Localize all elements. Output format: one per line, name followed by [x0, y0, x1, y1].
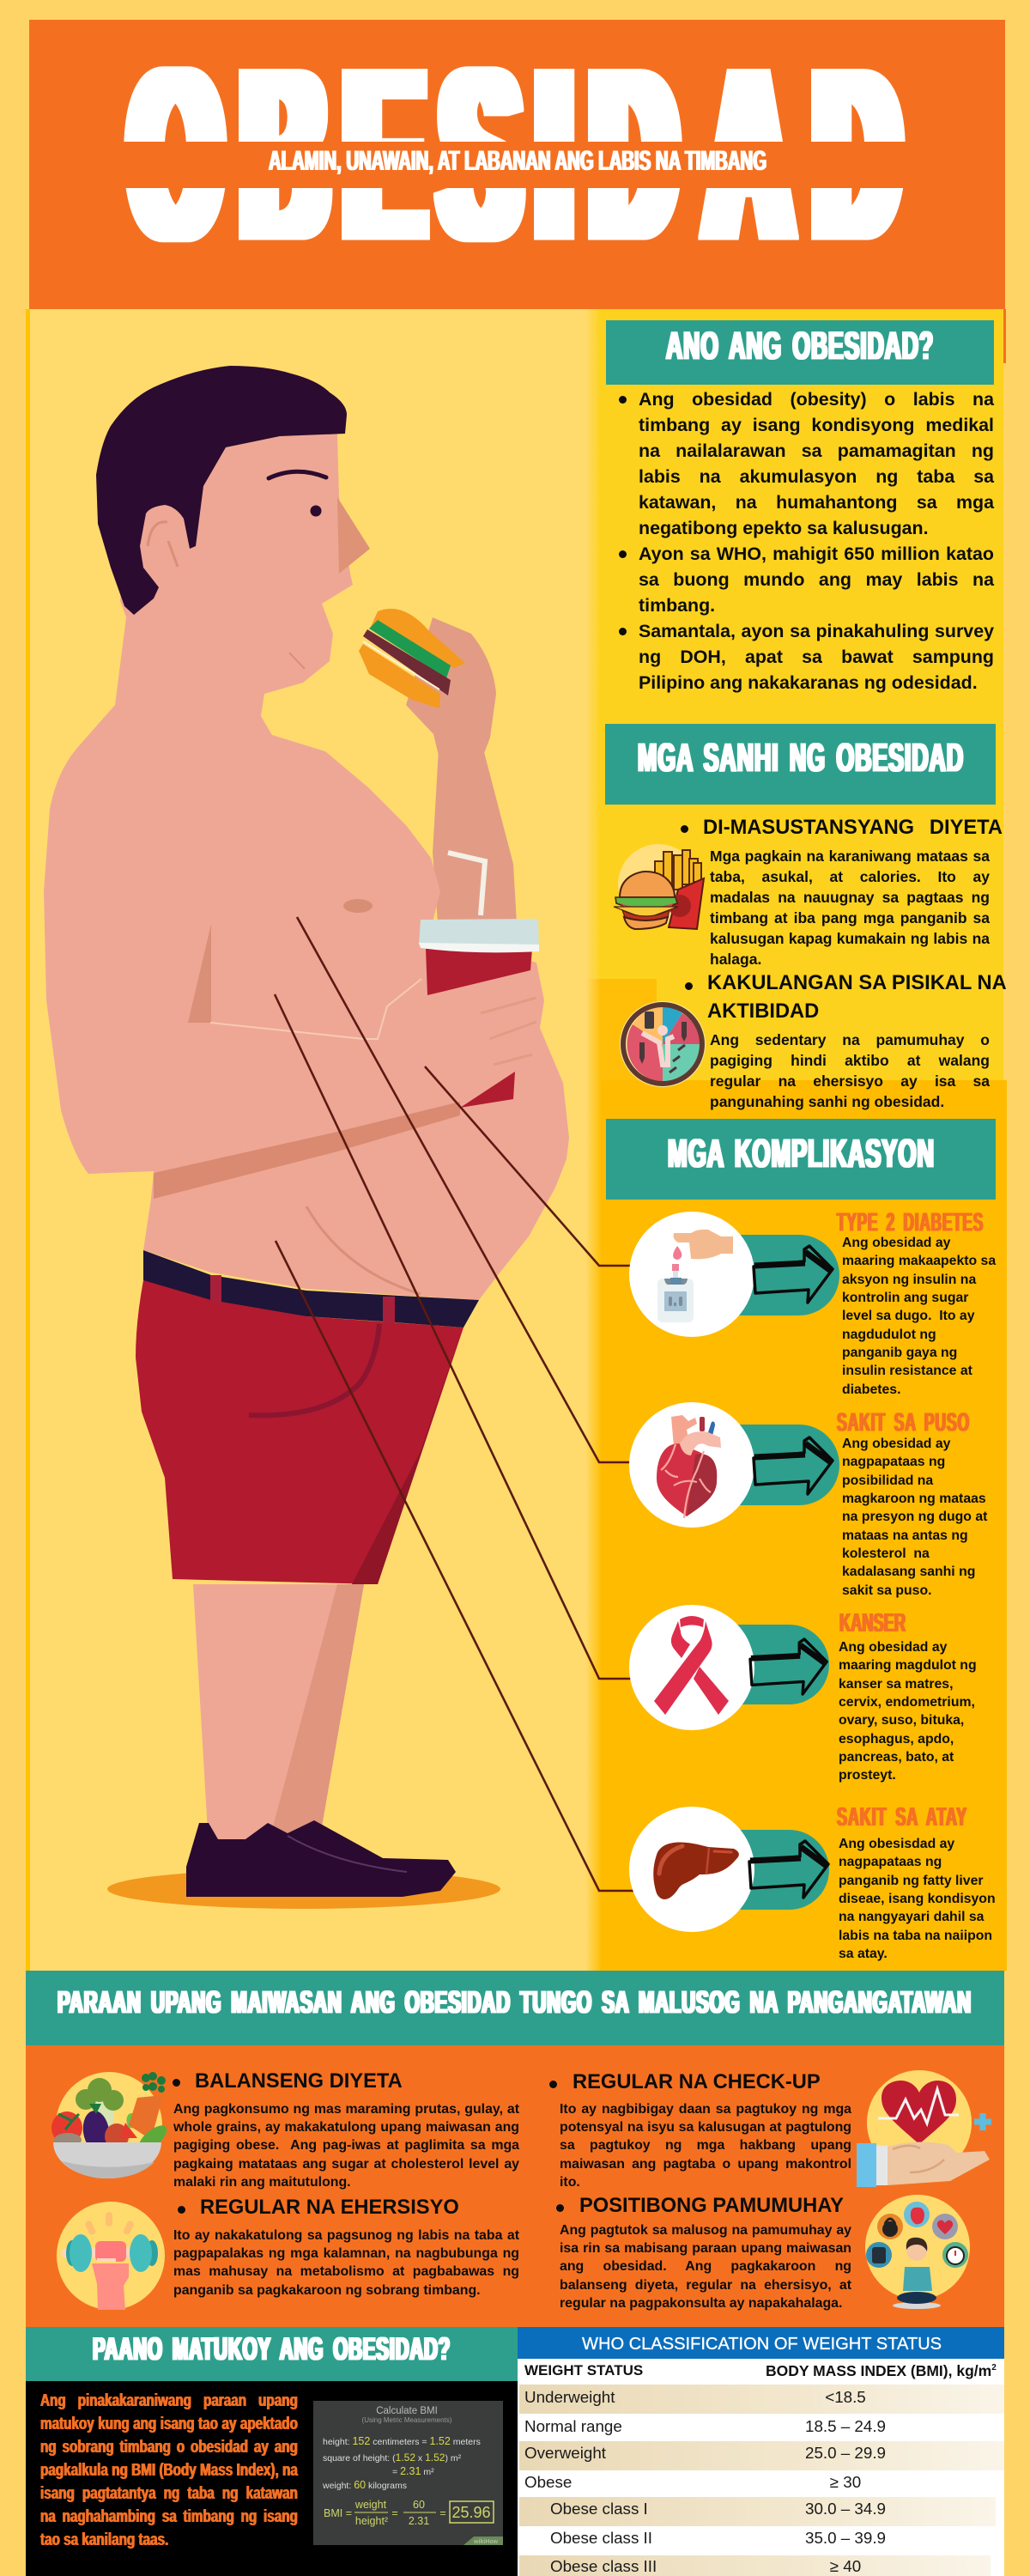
panel: header banner	[29, 20, 1005, 309]
body text: maiwasan ang pagtaba o upang makontrol	[560, 2157, 851, 2172]
body text: labis na akumulasyon ng taba sa	[639, 466, 994, 487]
text: panganib ng fatty liver	[839, 1874, 984, 1888]
text	[842, 1437, 987, 1598]
chalkboard BMI calculation: wikiHow	[473, 2539, 499, 2545]
panel: amber step	[601, 979, 657, 1080]
text: level sa dugo. Ito ay	[842, 1309, 975, 1323]
red shirt piece	[460, 1072, 515, 1108]
chalkboard BMI calculation: 60	[413, 2499, 425, 2511]
title: KANSER	[839, 1607, 906, 1637]
text	[839, 1640, 977, 1783]
pointer line: diabetes	[425, 1066, 631, 1266]
hand holding burger	[406, 617, 496, 756]
chalkboard BMI calculation: height: 152 centimeters = 1.52 meters	[323, 2435, 481, 2447]
arm shadow	[154, 1102, 460, 1199]
body text: malaki rin ang maitutulong.	[173, 2175, 351, 2190]
subheading: inactivity: KAKULANGAN SA PISIKAL NA	[707, 972, 1007, 994]
row: obese: ≥ 30	[830, 2473, 861, 2491]
arrow	[748, 1839, 830, 1899]
text: maaring makaapekto sa	[842, 1254, 996, 1268]
body text: pagkaing matataas ang sugar at cholesterol level ay	[173, 2157, 519, 2172]
body text: timbang ay isang kondisyong medikal	[639, 415, 994, 435]
chalkboard BMI calculation: weight: 60 kilograms	[322, 2479, 407, 2491]
text: nagpapataas ng	[839, 1855, 942, 1869]
shoe highlight	[288, 1836, 407, 1872]
row: normal	[524, 2418, 1005, 2435]
icon: dumbbell fist	[57, 2202, 165, 2310]
body text: Ito ay nakakatulong sa pagsunog ng labis na taba at	[173, 2228, 519, 2243]
body text: inactivity: pagiging hindi aktibo at walang	[710, 1052, 990, 1069]
text: posibilidad na	[842, 1473, 933, 1488]
body text: isa rin sa mabisang paraan upang maiwasan	[560, 2241, 851, 2256]
text: kanser sa matres,	[839, 1677, 953, 1692]
row: overweight: 25.0 – 29.9	[805, 2444, 886, 2462]
shorts shadow	[352, 1335, 460, 1584]
heading bar	[605, 724, 996, 805]
panel: mga sanhi ng obesidad	[605, 724, 1007, 1110]
straw	[448, 853, 485, 915]
panel: paano matukoy body	[26, 2381, 518, 2576]
text: nagdudulot ng	[842, 1327, 936, 1342]
body text: ng DOH, apat sa bawat sampung	[639, 647, 994, 667]
icon: liver in white circle	[629, 1807, 754, 1932]
text: Ang obesidad ay	[842, 1437, 950, 1451]
icon: burger and fries	[613, 844, 706, 930]
row: underweight: <18.5	[825, 2388, 866, 2406]
subheading: REGULAR NA EHERSISYO	[200, 2196, 459, 2219]
text: ovary, suso, bituka,	[839, 1713, 964, 1728]
chalkboard BMI calculation: square of height: (1.52 x 1.52) m²	[323, 2451, 462, 2464]
body text: diet	[710, 848, 991, 968]
text: insulin resistance at	[842, 1364, 972, 1378]
body text	[173, 2228, 519, 2298]
text: maaring magdulot ng	[839, 1658, 977, 1673]
text: sa atay.	[839, 1947, 888, 1961]
body text: diet: madalas na nauugnay sa pagtaas ng	[710, 889, 990, 906]
body text: balanseng diyeta, regular na ehersisyo, at	[560, 2278, 851, 2293]
heading bar	[606, 320, 994, 385]
text: mataas na antas ng	[842, 1528, 968, 1543]
panel: WHO classification table	[518, 2327, 1004, 2576]
icon: ribbon in white circle	[629, 1605, 754, 1730]
text	[842, 1236, 996, 1397]
title: OBESIDAD	[131, 19, 898, 291]
orange description text	[40, 2390, 298, 2552]
panel: paano matukoy heading	[26, 2327, 518, 2381]
column header: BMI: BODY MASS INDEX (BMI), kg/m2	[766, 2362, 997, 2379]
pointer line: cancer	[275, 994, 631, 1679]
chalkboard BMI calculation: =	[439, 2507, 446, 2519]
row: obese class II: 35.0 – 39.9	[805, 2529, 886, 2547]
orange description text: Ang pinakakaraniwang paraan upang	[40, 2391, 298, 2410]
row: obese class I	[550, 2500, 997, 2518]
forearm	[433, 749, 517, 923]
text: diabetes.	[842, 1382, 900, 1397]
nipple	[343, 899, 373, 913]
panel: fade strip upper	[585, 309, 601, 979]
body text: mas mahusay na metabolismo at pagbabawas ng	[173, 2264, 519, 2279]
row: obese class III	[550, 2558, 997, 2575]
body text: whole grains, ay makakatulong upang maiwasan ang	[173, 2120, 519, 2135]
body text: diet: taba, asukal, at calories. Ito ay	[710, 868, 990, 885]
body text: panganib sa pagkakaroon ng sobrang timbang.	[173, 2283, 481, 2298]
orange description text: matukoy kung ang isang tao ay apektado	[40, 2415, 298, 2433]
table title: WHO CLASSIFICATION OF WEIGHT STATUS	[582, 2334, 942, 2354]
bullet	[556, 2203, 563, 2212]
icon: daily activity clock	[620, 1001, 706, 1087]
text: Ang obesisdad ay	[839, 1837, 954, 1851]
text: pancreas, bato, at	[839, 1750, 954, 1765]
row bands	[519, 2385, 1004, 2414]
text: kontrolin ang sugar	[842, 1291, 968, 1305]
chalkboard BMI calculation: weight	[354, 2499, 387, 2511]
hair	[96, 366, 347, 615]
body text: diet: timbang at iba pang mga panganib sa	[710, 909, 990, 927]
icon: heart on hand	[854, 2069, 1000, 2190]
text: panganib gaya ng	[842, 1346, 957, 1360]
body text: Ang pagkonsumo ng mas maraming prutas, gulay, at	[173, 2102, 519, 2117]
shoes	[186, 1820, 456, 1897]
subheading: BALANSENG DIYETA	[195, 2070, 403, 2093]
body text: ang obesidad. Ang pagkakaroon ng	[560, 2259, 851, 2274]
bullet	[177, 2205, 185, 2214]
text: Ang obesidad ay	[839, 1640, 947, 1655]
row: obese class II: Obese class II	[550, 2529, 652, 2547]
text: na presyon ng dugo at	[842, 1510, 987, 1524]
text: Ang obesidad ay	[842, 1236, 950, 1250]
chin line	[289, 653, 305, 669]
eyebrow	[269, 471, 326, 478]
icon: vegetable bowl	[52, 2072, 167, 2178]
row: obese: Obese	[524, 2473, 572, 2491]
title cut band	[29, 141, 1005, 188]
subheading: REGULAR NA CHECK-UP	[573, 2071, 821, 2093]
body text: sa buong mundo ang may labis na	[639, 569, 994, 590]
subheading: inactivity: AKTIBIDAD	[707, 1000, 819, 1023]
body text	[639, 389, 994, 693]
body text: inactivity: Ang sedentary na pamumuhay o	[710, 1031, 990, 1048]
column header: weight status: WEIGHT STATUS	[524, 2362, 643, 2379]
arrow	[748, 1637, 828, 1696]
ear detail	[148, 522, 178, 567]
panel: ano ang obesidad	[606, 320, 994, 693]
row: obese class I: Obese class I	[550, 2500, 648, 2518]
text: kadalasang sanhi ng	[842, 1564, 975, 1579]
panel: fade strip lower	[585, 979, 601, 1971]
torso and head	[44, 434, 569, 1300]
text: esophagus, apdo,	[839, 1732, 954, 1747]
text: kolesterol na	[842, 1546, 930, 1561]
text	[839, 1837, 996, 1961]
complication: kanser	[629, 1605, 977, 1783]
body text: Pilipino ang nakakaranas ng odesidad.	[639, 672, 978, 693]
belly crease	[306, 1206, 421, 1294]
row: underweight: Underweight	[524, 2388, 615, 2406]
body text: inactivity	[710, 1031, 991, 1110]
body text: Samantala, ayon sa pinakahuling survey	[639, 621, 994, 641]
body text: pagpapalakas ng mga kalamnan, na nagbubunga ng	[173, 2246, 519, 2261]
eye	[311, 505, 321, 517]
fingers	[481, 998, 536, 1065]
teal pill	[678, 1235, 839, 1315]
bullets	[619, 396, 627, 635]
chalkboard BMI calculation: =	[391, 2507, 398, 2519]
teal pill	[678, 1625, 829, 1704]
body text: negatibong epekto sa kalusugan.	[639, 518, 929, 538]
chalkboard BMI calculation: 2.31	[409, 2515, 429, 2527]
body text: timbang.	[639, 595, 715, 616]
arm outline	[210, 979, 421, 1039]
body text	[560, 2221, 851, 2312]
icon: healthy lifestyle	[863, 2190, 974, 2310]
complication: sakit sa puso	[629, 1402, 987, 1598]
row: obese	[524, 2474, 1005, 2491]
nose	[337, 497, 370, 574]
text: diseae, isang kondisyon	[839, 1892, 996, 1906]
shorts	[136, 1280, 464, 1584]
row band	[519, 2441, 1004, 2470]
row band	[519, 2497, 996, 2526]
row: obese class III: ≥ 40	[830, 2557, 861, 2575]
orange description text: isang pagtatantya ng taba ng katawan	[40, 2484, 298, 2503]
body text: diet: halaga.	[710, 951, 761, 968]
body text: diet: Mga pagkain na karaniwang mataas sa	[710, 848, 990, 865]
arrow	[752, 1244, 834, 1304]
orange description text: tao sa kanilang taas.	[40, 2530, 168, 2549]
belt	[143, 1250, 479, 1327]
body text: regular na pagpakonsulta ay napakahalaga.	[560, 2296, 842, 2311]
text: na nangyayari dahil sa	[839, 1910, 984, 1924]
panel: illustration background	[26, 309, 601, 1971]
heading bar	[26, 1971, 1004, 2045]
body text: katawan, na humahantong sa mga	[639, 492, 994, 513]
row: normal: 18.5 – 24.9	[805, 2417, 886, 2435]
subheading: inactivity	[707, 972, 1007, 1023]
text: sakit sa puso.	[842, 1583, 931, 1598]
panel: orange edge	[1003, 309, 1006, 363]
row: underweight	[524, 2389, 1005, 2406]
body text	[560, 2100, 851, 2191]
body text: inactivity: regular na ehersisyo ay isa sa	[710, 1072, 990, 1090]
bullet	[685, 982, 692, 989]
body text: inactivity: pangunahing sanhi ng obesidad.	[710, 1093, 944, 1110]
legs	[193, 1584, 364, 1846]
panel: mga komplikasyon heading	[606, 1119, 996, 1200]
chalkboard BMI calculation: Calculate BMI	[376, 2406, 438, 2416]
pointer line: heart	[297, 917, 631, 1462]
row: normal: Normal range	[524, 2417, 622, 2435]
icon: heart in white circle	[629, 1402, 754, 1528]
teal pill	[678, 1830, 829, 1910]
bullet	[680, 824, 688, 833]
body text: diet: kalusugan kapag kumakain ng labis na	[710, 930, 990, 947]
body text: Ang pagtutok sa malusog na pamumuhay ay	[560, 2223, 851, 2238]
text: aksyon ng insulin na	[842, 1273, 976, 1287]
text: magkaroon ng mataas	[842, 1492, 986, 1506]
orange description text: ng sobrang timbang o obesidad ay ang	[40, 2438, 298, 2457]
illustration: man eating burger with pointer lines	[44, 366, 633, 1909]
bullet	[549, 2080, 556, 2088]
body text: na nailalarawan sa pamamagitan ng	[639, 440, 994, 461]
row: obese class III: Obese class III	[550, 2557, 657, 2575]
complication: type 2 diabetes	[629, 1207, 996, 1397]
body text: Ang obesidad (obesity) o labis na	[639, 389, 994, 410]
row: overweight	[524, 2445, 1005, 2462]
belt loops	[210, 1275, 395, 1323]
teal pill	[678, 1425, 839, 1505]
orange description text: na naghahambing sa timbang ng isang	[40, 2507, 298, 2526]
body text: potensyal na isyu sa kalusugan at pagtulong	[560, 2120, 851, 2135]
text: cervix, endometrium,	[839, 1695, 975, 1710]
row: obese class I: 30.0 – 34.9	[805, 2500, 886, 2518]
chalkboard BMI calculation: height²	[355, 2515, 388, 2527]
chalkboard BMI calculation: 25.96	[451, 2504, 491, 2521]
body text: pagiging obese. Ang pag-iwas at paglimita sa mga	[173, 2138, 519, 2153]
table title bar	[518, 2327, 1004, 2359]
text: prosteyt.	[839, 1768, 896, 1783]
complication: sakit sa atay	[629, 1801, 996, 1961]
pocket	[249, 1324, 379, 1415]
chalkboard BMI calculation: = 2.31 m²	[392, 2465, 434, 2477]
subheading: POSITIBONG PAMUMUHAY	[579, 2195, 844, 2217]
leg shadow	[268, 1584, 364, 1846]
panel: right column amber background	[601, 1080, 1007, 1971]
orange description text: pagkalkula ng BMI (Body Mass Index), na	[40, 2461, 298, 2480]
ground shadow	[107, 1869, 500, 1909]
pointer line: liver	[276, 1241, 635, 1891]
text: nagpapataas ng	[842, 1455, 945, 1469]
arrow	[752, 1436, 834, 1496]
panel: right column yellow background	[601, 309, 1003, 1080]
heading: PAANO MATUKOY ANG OBESIDAD?	[93, 2330, 451, 2366]
chalkboard BMI calculation: (Using Metric Measurements)	[362, 2416, 452, 2424]
chalkboard BMI calculation	[313, 2401, 503, 2545]
body text: Ito ay nagbibigay daan sa pagtukoy ng mga	[560, 2102, 851, 2117]
body text: sa pagtukoy ng mga hakbang upang	[560, 2138, 851, 2153]
text: labis na taba na naiipon	[839, 1929, 992, 1943]
subheading: diet: DI-MASUSTANSYANG DIYETA	[703, 817, 1003, 839]
icon: glucose meter in white circle	[629, 1212, 754, 1337]
row: obese class II	[550, 2530, 997, 2547]
panel: paraan upang maiwasan	[26, 1971, 1004, 2327]
burger	[359, 609, 465, 708]
chalkboard BMI calculation: BMI =	[324, 2507, 352, 2519]
body text: Ayon sa WHO, mahigit 650 million katao	[639, 544, 994, 564]
cup	[419, 919, 539, 995]
armpit	[188, 924, 211, 1023]
row: overweight: Overweight	[524, 2444, 606, 2462]
subtitle: ALAMIN, UNAWAIN, AT LABANAN ANG LABIS NA TIMBANG	[269, 145, 766, 176]
body text: ito.	[560, 2175, 580, 2190]
row band	[519, 2555, 991, 2576]
bullet	[172, 2078, 180, 2087]
body text	[173, 2102, 520, 2190]
